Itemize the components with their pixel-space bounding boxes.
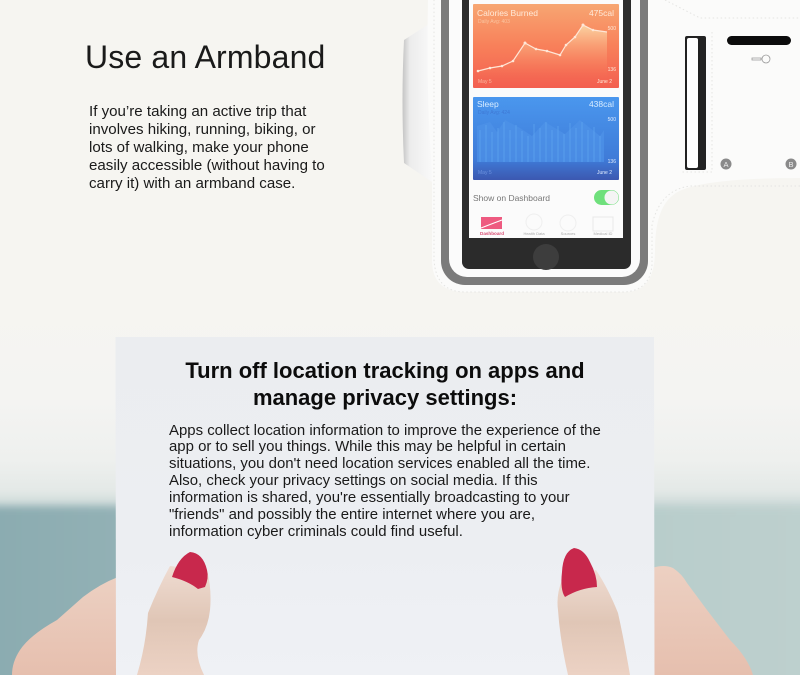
tab bar: Health Data xyxy=(523,231,545,236)
paper heading: Turn off location tracking on apps and xyxy=(185,358,585,383)
paper body text xyxy=(169,422,601,540)
phone case frame xyxy=(441,0,648,285)
calories card: 475cal xyxy=(589,8,614,18)
paper body text: Apps collect location information to improve the experience of the xyxy=(169,422,601,438)
tab bar: Medical ID xyxy=(594,231,613,236)
label B: B xyxy=(788,160,794,169)
phone body xyxy=(462,0,631,269)
armband text: lots of walking, make your phone xyxy=(89,139,309,156)
calories card xyxy=(473,4,619,88)
tab bar xyxy=(480,214,613,236)
sleep card xyxy=(473,97,619,180)
paper heading xyxy=(185,358,585,410)
key icon xyxy=(752,55,770,63)
armband text: carry it) with an armband case. xyxy=(89,175,295,192)
tab bar: Dashboard xyxy=(480,231,504,236)
sleep card: June 2 xyxy=(597,170,612,176)
calories card: May 5 xyxy=(478,79,492,85)
calories card: June 2 xyxy=(597,79,612,85)
home button xyxy=(533,244,559,270)
calories card: 500 xyxy=(608,26,616,32)
sleep card: Sleep xyxy=(477,99,499,109)
calories card: Daily Avg: 403 xyxy=(478,19,510,25)
label A: A xyxy=(723,160,729,169)
armband text xyxy=(89,103,325,192)
phone screen xyxy=(469,0,623,238)
paper sheet xyxy=(116,337,654,675)
paper heading: manage privacy settings: xyxy=(253,385,517,410)
left thumb with nail xyxy=(137,552,211,675)
paper body text: "friends" and possibly the entire internet where you are, xyxy=(169,506,535,523)
paper body text: app or to sell you things. While this may be helpful in certain xyxy=(169,438,566,455)
paper body text: information is shared, you're essentially broadcasting to your xyxy=(169,489,570,506)
armband text: involves hiking, running, biking, or xyxy=(89,121,316,138)
strap slot xyxy=(685,36,706,170)
calories card: Calories Burned xyxy=(477,8,538,18)
sleep card: 500 xyxy=(608,117,616,123)
armband strap xyxy=(402,0,800,292)
calories card: 136 xyxy=(608,67,616,73)
right hand behind paper xyxy=(652,566,753,675)
sleep card: May 5 xyxy=(478,170,492,176)
paper body text: information cyber criminals could find useful. xyxy=(169,523,463,540)
title: Use an Armband xyxy=(85,39,325,75)
key slot xyxy=(727,36,791,45)
dashboard toggle row: Show on Dashboard xyxy=(473,193,550,203)
sleep card: 438cal xyxy=(589,99,614,109)
sleep card: 136 xyxy=(608,159,616,165)
label A xyxy=(720,158,732,170)
dashboard toggle row xyxy=(473,190,619,205)
tab bar: Sources xyxy=(561,231,575,236)
sea xyxy=(0,506,800,675)
right thumb with nail xyxy=(558,548,630,675)
armband text: If you’re taking an active trip that xyxy=(89,103,306,120)
paper body text: Also, check your privacy settings on social media. If this xyxy=(169,472,538,489)
paper body text: situations, you don't need location services enabled all the time. xyxy=(169,455,590,472)
label B xyxy=(786,158,796,170)
armband text: easily accessible (without having to xyxy=(89,157,325,174)
left hand behind paper xyxy=(12,577,118,675)
sleep card: Daily Avg: 424 xyxy=(478,110,510,116)
